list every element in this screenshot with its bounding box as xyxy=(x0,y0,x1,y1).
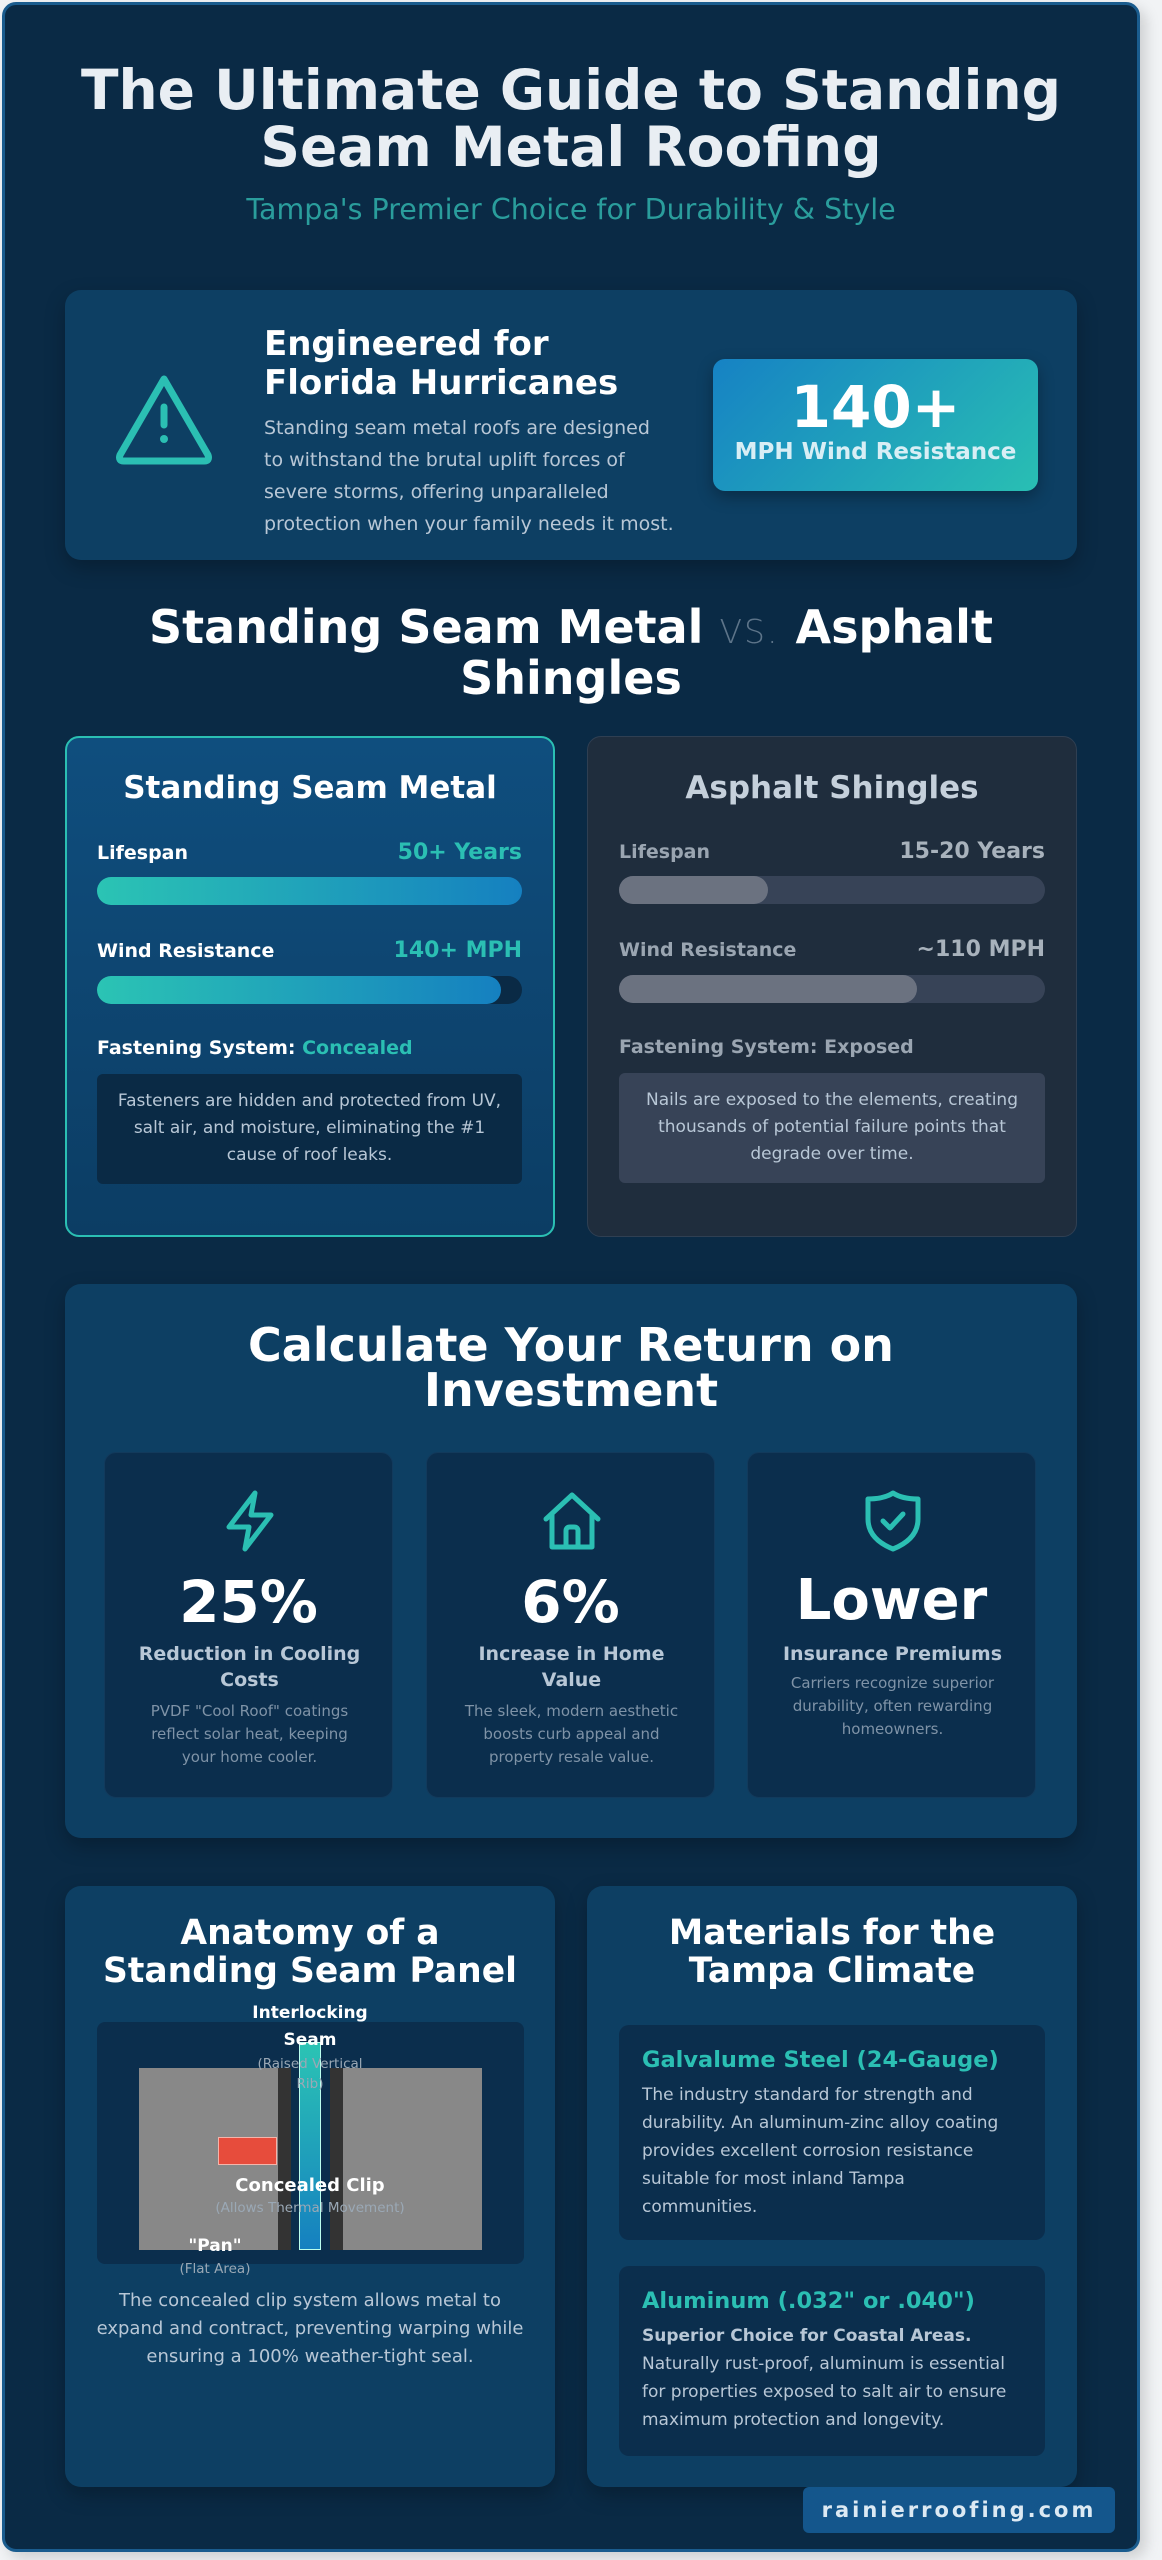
label: Insurance Premiums xyxy=(783,1643,1002,1665)
roi card: cooling xyxy=(104,1452,393,1798)
icon: lightning xyxy=(226,1490,274,1552)
panel: asphalt shingles: Wind Resistance xyxy=(619,939,796,961)
label: seam xyxy=(252,2003,368,2092)
footer badge xyxy=(803,2487,1115,2533)
label: seam: Seam xyxy=(284,2030,336,2050)
lifespan row xyxy=(97,840,522,865)
desc: Carriers recognize superior durability, often rewarding homeowners. xyxy=(791,1674,994,1738)
wind bar xyxy=(619,975,1045,1003)
panel: anatomy xyxy=(65,1886,555,2487)
fastening: Fastening System: Concealed xyxy=(97,1037,413,1059)
icon: warning triangle xyxy=(116,376,212,464)
desc box: Fasteners are hidden and protected from UV, salt air, and moisture, eliminating the #1 cause of roof leaks. xyxy=(118,1091,501,1165)
footer badge: rainierroofing.com xyxy=(822,2498,1096,2522)
panel: standing seam metal: 140+ MPH xyxy=(394,938,522,963)
title: Seam Metal Roofing xyxy=(260,115,882,179)
label: clip: Concealed Clip xyxy=(235,2175,385,2196)
heading: Tampa Climate xyxy=(689,1951,975,1991)
heading xyxy=(669,1913,995,1991)
lifespan row xyxy=(619,839,1045,864)
pan rects xyxy=(139,2068,278,2250)
text: The concealed clip system allows metal to expand and contract, preventing warping while ensuring a 100% weather-tight seal. xyxy=(97,2290,523,2367)
label: pan: "Pan" xyxy=(188,2236,242,2256)
wind row xyxy=(619,937,1045,962)
roi card: home value xyxy=(426,1452,715,1798)
panel: asphalt shingles: 15-20 Years xyxy=(899,839,1045,864)
desc: The sleek, modern aesthetic boosts curb appeal and property resale value. xyxy=(465,1702,678,1766)
heading: comparison: Standing Seam Metal VS. Asphalt xyxy=(149,600,993,654)
heading: Engineered for xyxy=(264,324,549,364)
clip xyxy=(218,2137,277,2165)
label: seam: Interlocking xyxy=(252,2003,368,2023)
fastening: Fastening System: Exposed xyxy=(619,1036,914,1058)
heading: comparison xyxy=(149,600,993,705)
panel: asphalt shingles: Lifespan xyxy=(619,841,710,863)
label: clip: (Allows Thermal Movement) xyxy=(215,2200,405,2216)
wind row xyxy=(97,938,522,963)
roi card: insurance xyxy=(747,1452,1036,1798)
desc box xyxy=(97,1074,522,1184)
panel: asphalt shingles: ~110 MPH xyxy=(917,937,1045,962)
subtitle: Tampa's Premier Choice for Durability & Style xyxy=(246,193,896,226)
material: galvalume xyxy=(619,2025,1045,2240)
card title: Standing Seam Metal xyxy=(123,770,497,806)
material: aluminum xyxy=(619,2266,1045,2456)
stat: 6% xyxy=(521,1568,620,1636)
lifespan bar xyxy=(619,876,1045,904)
label: Increase in Home Value xyxy=(478,1643,665,1691)
stat box xyxy=(713,359,1038,491)
panel: standing seam metal: 50+ Years xyxy=(398,840,522,865)
panel: materials xyxy=(587,1886,1077,2487)
material: aluminum: Superior Choice for Coastal Areas. Naturally rust-proof, aluminum is essential for properties exposed to salt air to ensure maximum protection and longevity. xyxy=(642,2326,1006,2430)
desc box: Nails are exposed to the elements, creating thousands of potential failure points that degrade over time. xyxy=(646,1090,1018,1164)
heading: Standing Seam Panel xyxy=(103,1951,517,1991)
label: seam: Rib) xyxy=(297,2076,323,2092)
lifespan bar xyxy=(97,877,522,905)
icon: shield xyxy=(866,1490,920,1552)
stat box: MPH Wind Resistance xyxy=(735,439,1016,465)
desc box xyxy=(619,1073,1045,1183)
title: The Ultimate Guide to Standing xyxy=(81,58,1061,122)
wind bar xyxy=(97,976,522,1004)
heading xyxy=(103,1913,517,1991)
label: clip xyxy=(215,2175,405,2216)
stat: 25% xyxy=(179,1568,318,1636)
stat: Lower xyxy=(796,1568,987,1633)
heading: Florida Hurricanes xyxy=(264,363,618,403)
material: aluminum: Aluminum (.032" or .040") xyxy=(642,2288,975,2314)
desc: PVDF "Cool Roof" coatings reflect solar heat, keeping your home cooler. xyxy=(151,1702,348,1766)
label: pan: (Flat Area) xyxy=(180,2261,250,2277)
heading: Materials for the xyxy=(669,1913,995,1953)
heading xyxy=(248,1318,894,1417)
card title: Asphalt Shingles xyxy=(685,770,979,806)
text: Standing seam metal roofs are designed to withstand the brutal uplift forces of severe storms, offering unparalleled protection when your family needs it most. xyxy=(264,417,674,535)
label: seam: (Raised Vertical xyxy=(257,2056,363,2072)
seam xyxy=(299,2042,321,2250)
diagram xyxy=(97,2022,524,2264)
heading: Anatomy of a xyxy=(180,1913,440,1953)
heading xyxy=(264,324,618,403)
label: pan xyxy=(180,2236,250,2277)
panel: ROI xyxy=(65,1284,1077,1838)
icon: house xyxy=(544,1492,600,1550)
panel: hurricanes xyxy=(65,290,1077,560)
panel: asphalt shingles xyxy=(587,736,1077,1237)
panel: standing seam metal xyxy=(65,736,555,1237)
material: galvalume: The industry standard for strength and durability. An aluminum-zinc alloy coating provides excellent corrosion resistance suitable for most inland Tampa communities. xyxy=(642,2085,998,2217)
stat box: 140+ xyxy=(791,373,960,441)
panel: standing seam metal: Lifespan xyxy=(97,842,188,864)
heading: comparison: Shingles xyxy=(460,651,682,705)
heading: Investment xyxy=(424,1363,718,1417)
panel: standing seam metal: Wind Resistance xyxy=(97,940,274,962)
title xyxy=(81,58,1061,179)
label: Reduction in Cooling Costs xyxy=(139,1643,360,1691)
material: galvalume: Galvalume Steel (24-Gauge) xyxy=(642,2047,999,2073)
heading: Calculate Your Return on xyxy=(248,1318,894,1372)
